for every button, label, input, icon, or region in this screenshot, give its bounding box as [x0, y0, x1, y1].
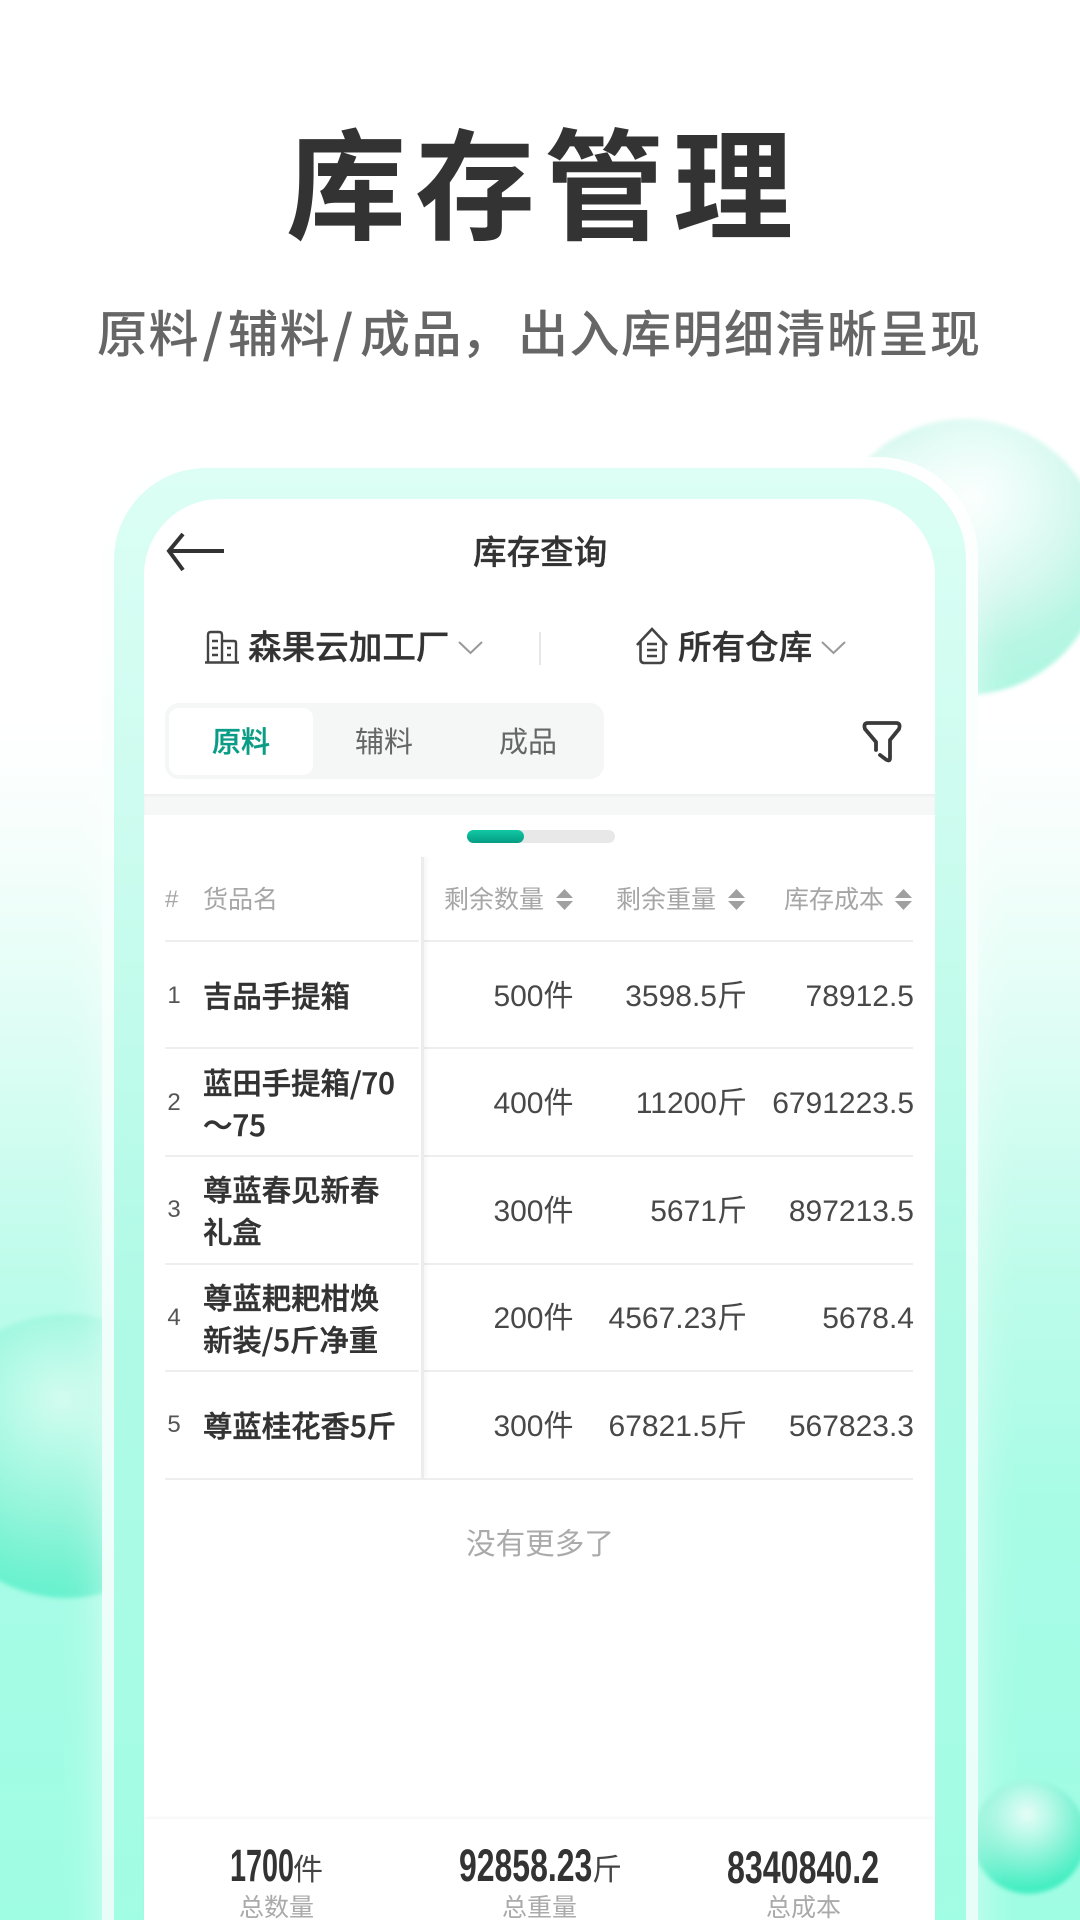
row 2: 6791223.5 [772, 1087, 914, 1120]
scroll thumb [467, 830, 524, 843]
total weight [459, 1840, 622, 1920]
row 1: 3598.5斤 [625, 980, 747, 1013]
icon: warehouse house [636, 627, 668, 664]
row 4: 4567.23斤 [609, 1302, 747, 1335]
row 3: 300件 [493, 1195, 574, 1228]
subtitle: ， [461, 295, 512, 367]
row 1: 500件 [493, 980, 574, 1013]
row 2: 2 [167, 1089, 181, 1116]
footer totals [144, 1819, 935, 1920]
factory name: 森果云加工厂 [248, 630, 449, 667]
row 5: 尊蓝桂花香5斤 [203, 1404, 396, 1446]
phone mint body [114, 468, 966, 1920]
screen header [166, 532, 607, 572]
row 4: 新装/5斤净重 [203, 1318, 378, 1360]
row 3 [167, 1168, 914, 1252]
subtitle: 辅料 [228, 295, 331, 367]
total cost [727, 1842, 879, 1920]
row 2: 11200斤 [636, 1087, 747, 1120]
total quantity [230, 1840, 323, 1920]
title: 库存管理 [286, 122, 802, 256]
chevron [821, 641, 846, 654]
row 2 [167, 1061, 914, 1145]
row 1: 1 [167, 982, 181, 1009]
row dividers [165, 940, 913, 942]
icon: factory building [205, 630, 239, 664]
screen title: 库存查询 [473, 535, 607, 572]
row 5: 300件 [493, 1410, 574, 1443]
row 3: 897213.5 [789, 1195, 914, 1228]
total weight: 斤 [592, 1854, 622, 1887]
row 5: 567823.3 [789, 1410, 914, 1443]
sort icon [895, 889, 912, 910]
frozen column divider [421, 857, 424, 1478]
row 3: 3 [167, 1196, 181, 1223]
icon: filter [862, 721, 902, 762]
row 4 [167, 1276, 914, 1360]
row 2: 400件 [493, 1087, 574, 1120]
decorative sphere: top right [827, 419, 1080, 695]
table header: 剩余重量 [616, 886, 716, 914]
row 4: 4 [167, 1304, 181, 1331]
total weight: 92858.23 [459, 1840, 592, 1891]
table header: 货品名 [203, 886, 278, 914]
row 2: ～75 [203, 1103, 266, 1145]
table header: 剩余数量 [444, 886, 544, 914]
row 1 [167, 974, 914, 1016]
no more data note: 没有更多了 [466, 1528, 614, 1561]
decorative sphere: left [0, 1314, 209, 1598]
scroll indicator [467, 830, 615, 843]
row 1: 吉品手提箱 [203, 974, 350, 1016]
tab: raw: 原料 [212, 727, 270, 759]
phone white outer ring [102, 457, 978, 1920]
row 3: 尊蓝春见新春 [203, 1168, 379, 1210]
row 3: 5671斤 [650, 1195, 747, 1228]
sort icon [556, 889, 573, 910]
divider [539, 632, 540, 665]
row 5: 5 [167, 1411, 181, 1438]
sort icon [728, 889, 745, 910]
row 4: 5678.4 [822, 1302, 914, 1335]
total quantity: 件 [293, 1854, 323, 1887]
selector row [205, 627, 846, 667]
inventory table [165, 857, 914, 1480]
table header [165, 886, 912, 914]
row 2: 蓝田手提箱/70 [203, 1061, 395, 1103]
row 5: 67821.5斤 [609, 1410, 747, 1443]
subtitle: / [203, 295, 224, 367]
chevron [458, 641, 483, 654]
subtitle: 原料 [97, 295, 200, 367]
active tab [169, 708, 313, 775]
row 4: 尊蓝耙耙柑焕 [203, 1276, 379, 1318]
row 3: 礼盒 [203, 1210, 262, 1252]
decorative sphere: bottom right [972, 1780, 1080, 1894]
row 1: 78912.5 [806, 980, 914, 1013]
total cost: 8340840.2 [727, 1842, 879, 1893]
tab: finished: 成品 [499, 727, 557, 759]
category tabs [165, 703, 604, 779]
phone mockup [78, 452, 1004, 1920]
table header: 库存成本 [784, 886, 884, 914]
subtitle: 出入库明细清晰呈现 [518, 295, 982, 367]
tab: auxiliary: 辅料 [355, 727, 413, 759]
row 5 [167, 1404, 914, 1446]
subtitle [97, 295, 982, 367]
warehouse name: 所有仓库 [678, 630, 812, 667]
subtitle: / [333, 295, 354, 367]
gray separator band [144, 794, 935, 815]
total quantity: 1700 [230, 1840, 294, 1891]
phone screen [144, 499, 935, 1920]
subtitle: 成品 [360, 295, 463, 367]
row 4: 200件 [493, 1302, 574, 1335]
icon: back arrow [166, 532, 224, 572]
table header: # [165, 886, 178, 913]
